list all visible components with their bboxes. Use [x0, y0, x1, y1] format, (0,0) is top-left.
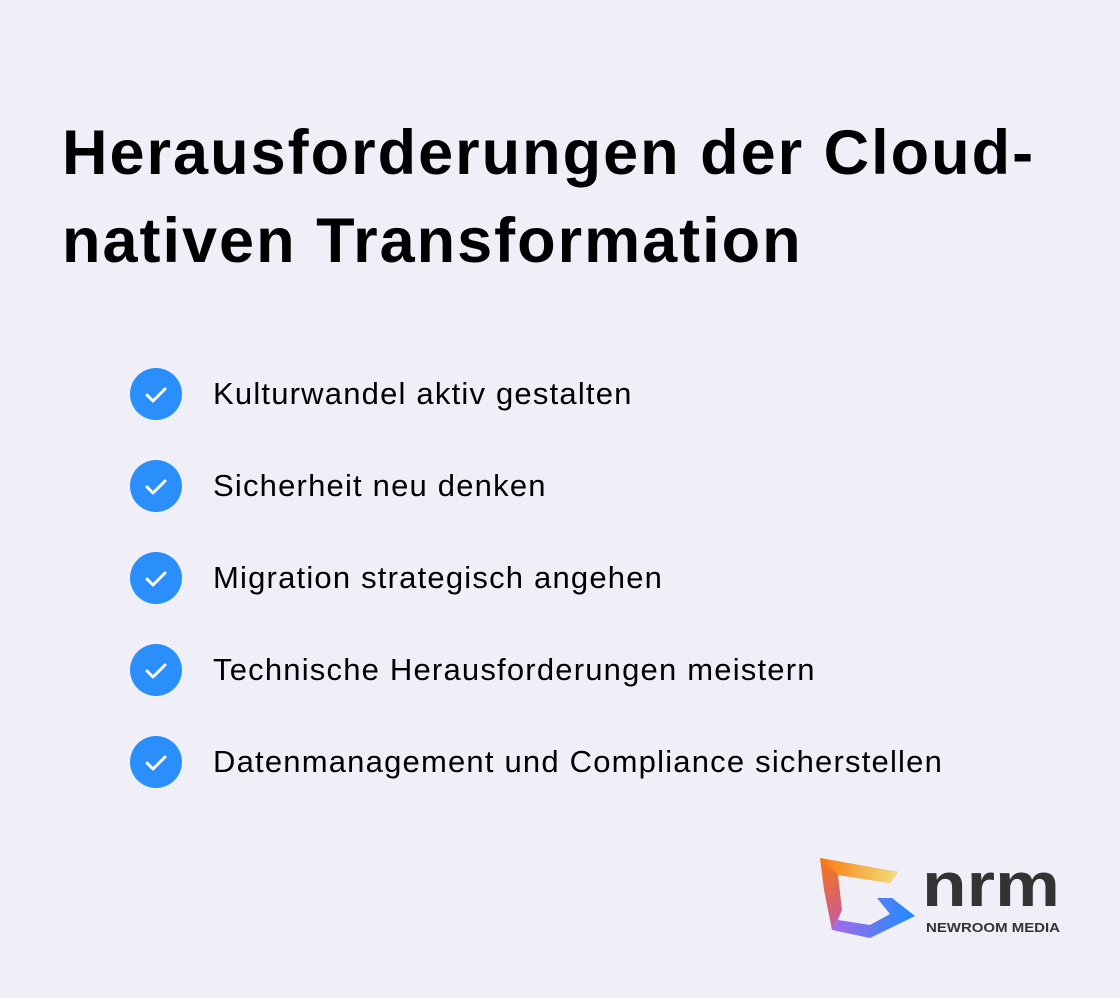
- title: [62, 118, 1035, 276]
- list item 4: [130, 644, 816, 696]
- icon: check: [130, 552, 182, 604]
- icon: check: [130, 460, 182, 512]
- list item 1: Kulturwandel aktiv gestalten: [213, 376, 633, 411]
- list item 5: [130, 736, 943, 788]
- logo mark: [820, 858, 915, 938]
- list item 2: [130, 460, 547, 512]
- list item 2: Sicherheit neu denken: [213, 468, 547, 503]
- icon: check: [130, 368, 182, 420]
- logo text: nrm: [922, 851, 1060, 920]
- list item 1: [130, 368, 633, 420]
- logo text: NEWROOM MEDIA: [926, 920, 1061, 935]
- icon: check: [130, 736, 182, 788]
- list item 3: [130, 552, 663, 604]
- title: nativen Transformation: [62, 206, 803, 276]
- logo text: [922, 851, 1061, 935]
- icon: check: [130, 644, 182, 696]
- logo: [820, 851, 1061, 938]
- list item 4: Technische Herausforderungen meistern: [213, 652, 816, 687]
- title: Herausforderungen der Cloud-: [62, 118, 1035, 188]
- list item 3: Migration strategisch angehen: [213, 560, 663, 595]
- list item 5: Datenmanagement und Compliance sicherstellen: [213, 744, 943, 779]
